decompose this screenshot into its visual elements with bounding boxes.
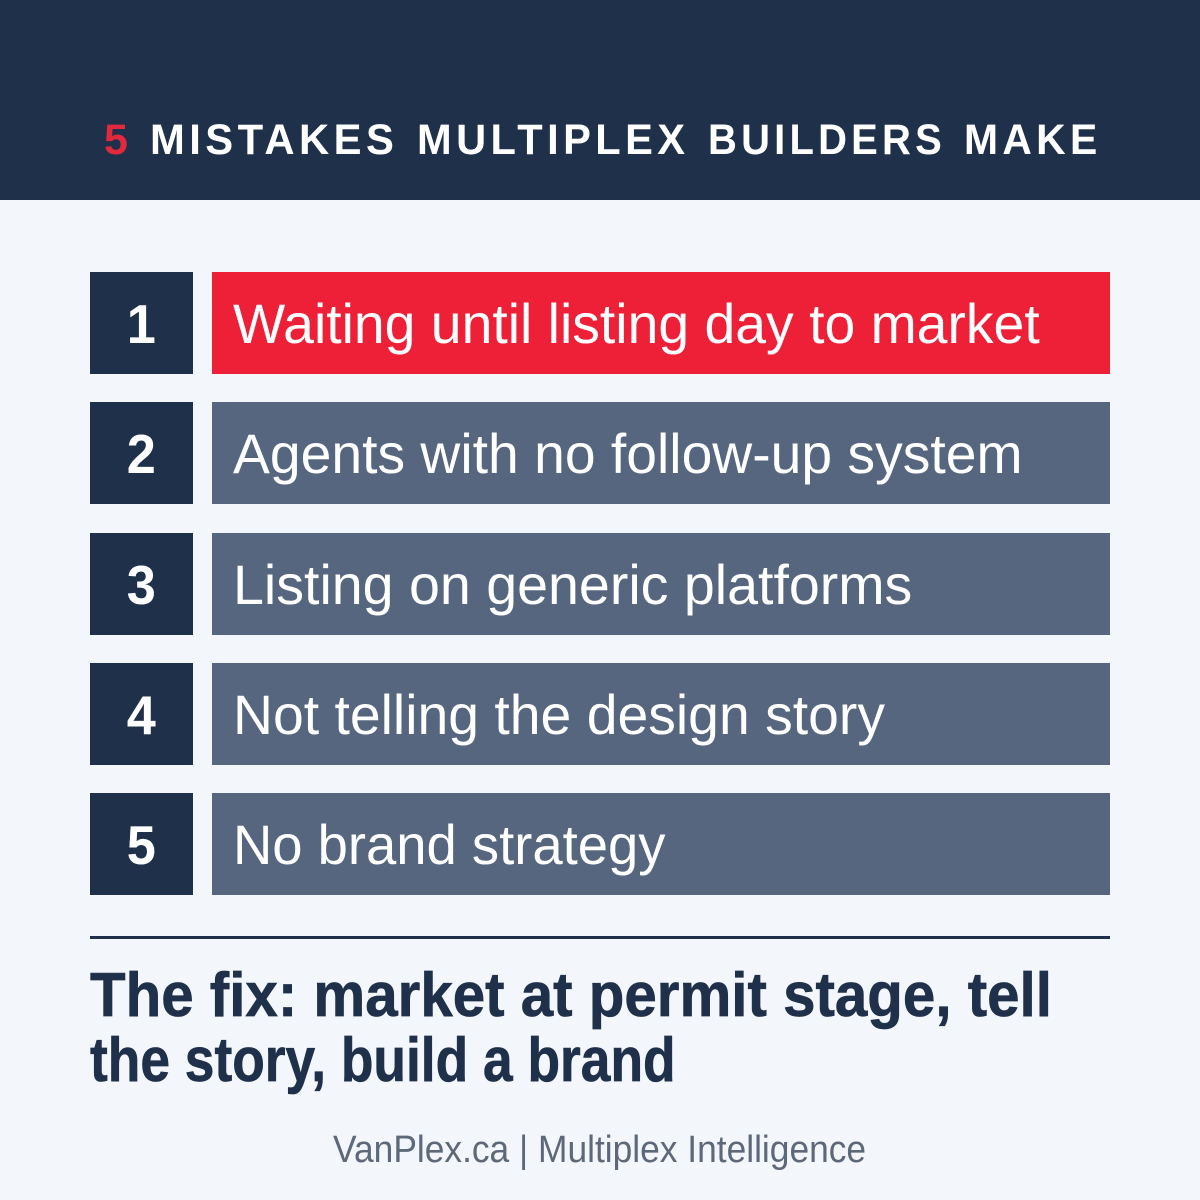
number badge 3	[90, 533, 193, 635]
number badge 5: 5	[127, 814, 156, 876]
fix statement	[90, 961, 1052, 1095]
title: MAKE	[964, 116, 1102, 164]
number badge 1: 1	[127, 293, 156, 355]
title: 5	[104, 116, 132, 164]
mistake 5 bar: No brand strategy	[233, 813, 665, 876]
list of mistakes	[90, 272, 1110, 895]
fix statement: the story, build a brand	[90, 1026, 676, 1095]
number badge 5	[90, 793, 193, 895]
number badge 1	[90, 272, 193, 374]
title: MULTIPLEX	[416, 116, 689, 164]
number badge 2	[90, 402, 193, 504]
title: BUILDERS	[708, 116, 946, 164]
mistake 5 bar	[212, 793, 1110, 895]
fix statement: The fix: market at permit stage, tell	[90, 961, 1052, 1030]
mistake 1 bar	[212, 272, 1110, 374]
number badge 4: 4	[127, 684, 156, 746]
mistake 4 bar: Not telling the design story	[233, 683, 885, 746]
title: MISTAKES	[150, 116, 398, 164]
footer credit: VanPlex.ca | Multiplex Intelligence	[333, 1129, 867, 1171]
number badge 2: 2	[127, 423, 156, 485]
number badge 3: 3	[127, 554, 156, 616]
title	[104, 116, 1102, 164]
mistake 3 bar	[212, 533, 1110, 635]
number badge 4	[90, 663, 193, 765]
mistake 4 bar	[212, 663, 1110, 765]
header band	[0, 0, 1200, 200]
mistake 3 bar: Listing on generic platforms	[233, 553, 912, 616]
mistake 1 bar: Waiting until listing day to market	[233, 292, 1040, 355]
mistake 2 bar	[212, 402, 1110, 504]
mistake 2 bar: Agents with no follow-up system	[233, 422, 1023, 485]
